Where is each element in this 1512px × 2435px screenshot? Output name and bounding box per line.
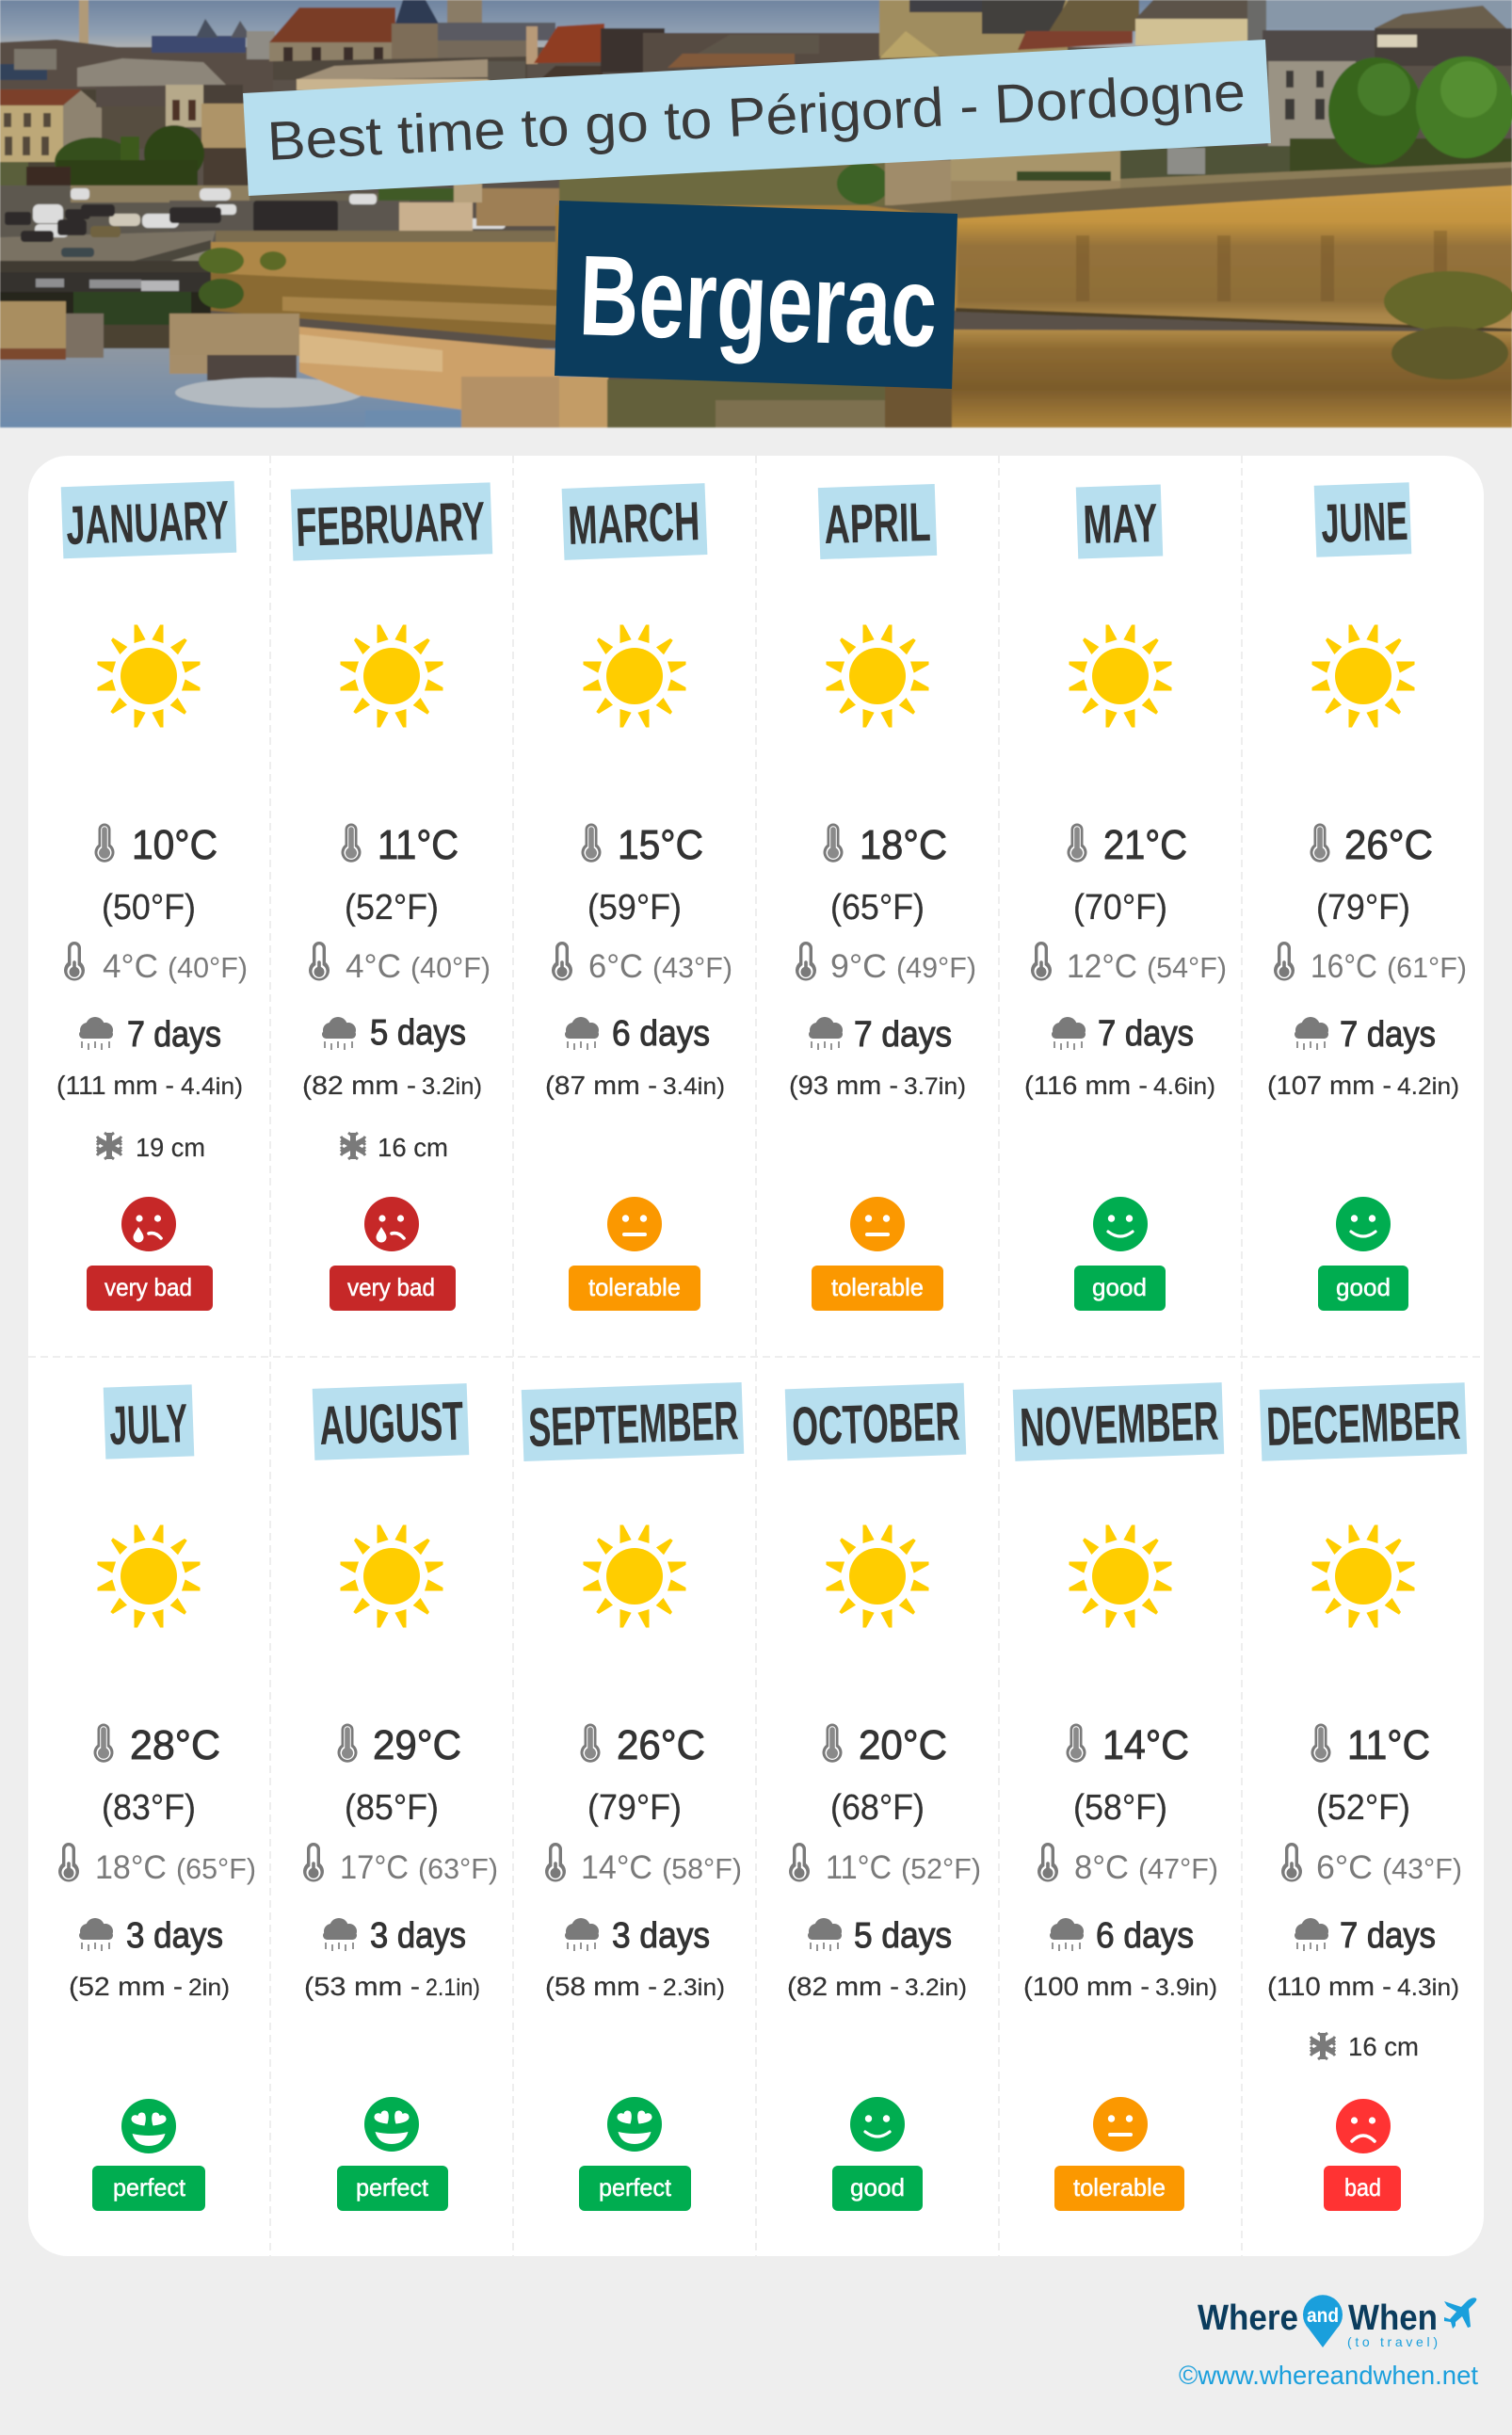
icon: sun — [341, 625, 442, 727]
logo: Where and When (to travel): (to travel) — [1347, 2334, 1438, 2349]
rainy days: 7 days — [1098, 1014, 1194, 1054]
snowfall: 19 cm — [136, 1133, 205, 1162]
low temperature: (65°F) — [176, 1852, 256, 1885]
precipitation — [545, 1071, 725, 1100]
low temperature: 14°C — [581, 1849, 652, 1886]
precipitation — [1267, 1071, 1459, 1100]
high temperature: 28°C — [130, 1722, 220, 1768]
rating face: tolerable — [850, 1197, 905, 1251]
month label: July — [104, 1384, 194, 1459]
panel: December — [1260, 1382, 1467, 2211]
rainy days: 3 days — [126, 1916, 223, 1956]
panel: June — [1267, 482, 1467, 1311]
high temperature: 26°C — [1344, 822, 1433, 868]
high temperature — [1066, 1722, 1189, 1768]
rating badge: perfect: perfect — [113, 2173, 186, 2201]
panel: January — [56, 481, 248, 1311]
low temperature: (40°F) — [410, 951, 491, 984]
low temperature — [1031, 942, 1227, 985]
rating badge: tolerable: tolerable — [1073, 2173, 1166, 2201]
rating face: perfect — [121, 2099, 176, 2153]
logo: Where and When (to travel): Where — [1198, 2298, 1298, 2338]
high temperature Fahrenheit: (58°F) — [1073, 1788, 1167, 1828]
month label: June: JUNE — [1320, 491, 1408, 555]
rainy days: 6 days — [1096, 1916, 1194, 1956]
month label: January — [61, 481, 236, 558]
snowfall — [97, 1133, 205, 1162]
precipitation — [69, 1972, 230, 2001]
panel: March — [545, 483, 732, 1311]
rainy days — [1052, 1014, 1194, 1054]
rating badge: very bad: very bad — [105, 1273, 192, 1301]
rating face: tolerable — [1093, 2097, 1148, 2152]
logo: Where and When (to travel): When — [1348, 2298, 1438, 2338]
rainy days: 7 days — [1340, 1015, 1436, 1055]
low temperature — [64, 942, 248, 985]
precipitation: 4.2in) — [1397, 1073, 1459, 1100]
month label: May — [1076, 485, 1163, 558]
rating badge: tolerable: tolerable — [588, 1273, 681, 1301]
high temperature Fahrenheit: (79°F) — [587, 1788, 682, 1828]
month label: September: SEPTEMBER — [527, 1390, 739, 1459]
icon: sun — [584, 1525, 685, 1627]
high temperature: 18°C — [860, 822, 947, 868]
panel: monthly climate card — [28, 456, 1484, 2256]
high temperature Fahrenheit: (65°F) — [830, 888, 925, 927]
high temperature Fahrenheit: (50°F) — [102, 888, 196, 927]
icon: sun — [827, 625, 928, 727]
rainy days: 7 days — [1340, 1916, 1436, 1956]
month label: August: AUGUST — [318, 1391, 464, 1457]
precipitation: (107 mm - — [1267, 1071, 1391, 1100]
low temperature: (43°F) — [1382, 1852, 1462, 1885]
rating badge: good: good — [1092, 1273, 1147, 1301]
precipitation: 4.3in) — [1397, 1975, 1459, 2001]
precipitation — [545, 1972, 725, 2001]
rainy days: 3 days — [370, 1916, 466, 1956]
month label: February — [291, 482, 492, 561]
low temperature — [796, 942, 976, 985]
rainy days — [565, 1014, 710, 1054]
rating face: tolerable — [607, 1197, 662, 1251]
precipitation — [1267, 1972, 1459, 2001]
low temperature — [303, 1843, 498, 1886]
rating badge: very bad — [87, 1266, 213, 1311]
rainy days — [1295, 1015, 1436, 1055]
high temperature — [337, 1722, 461, 1768]
rainy days — [809, 1015, 952, 1055]
precipitation: (116 mm - — [1024, 1071, 1148, 1100]
low temperature: 4°C — [103, 948, 158, 985]
high temperature Fahrenheit: (79°F) — [1316, 888, 1410, 927]
high temperature: 29°C — [373, 1722, 461, 1768]
precipitation — [304, 1972, 480, 2001]
low temperature: 6°C — [1316, 1849, 1373, 1886]
icon: sun — [1070, 625, 1171, 727]
month label: June — [1314, 482, 1411, 557]
rating face: bad — [1336, 2099, 1391, 2153]
rating face: very bad — [364, 1197, 419, 1251]
rating face: perfect — [364, 2097, 419, 2152]
low temperature: (40°F) — [168, 951, 248, 984]
precipitation: 2.1in) — [426, 1975, 480, 2001]
rainy days — [79, 1015, 221, 1055]
rainy days — [1050, 1916, 1194, 1956]
low temperature: (54°F) — [1147, 951, 1227, 984]
precipitation — [787, 1972, 967, 2001]
icon: sun — [341, 1525, 442, 1627]
rating badge: good — [1074, 1266, 1166, 1311]
rainy days — [565, 1916, 710, 1956]
month label: March: MARCH — [567, 491, 700, 556]
high temperature: 11°C — [1347, 1722, 1430, 1768]
high temperature — [582, 822, 703, 868]
rating face: good — [1336, 1197, 1391, 1251]
high temperature — [823, 1722, 947, 1768]
precipitation — [1024, 1071, 1215, 1100]
snowfall — [341, 1133, 448, 1162]
high temperature Fahrenheit: (83°F) — [102, 1788, 196, 1828]
title banner: Best time to go to Périgord - Dordogne — [265, 61, 1247, 172]
precipitation: (52 mm - — [69, 1972, 183, 2001]
icon: sun — [98, 1525, 200, 1627]
high temperature — [1311, 822, 1433, 868]
precipitation — [789, 1071, 966, 1100]
rainy days: 3 days — [612, 1916, 710, 1956]
month label: July: JULY — [108, 1393, 188, 1457]
low temperature: 6°C — [588, 948, 643, 985]
rating badge: perfect: perfect — [599, 2173, 672, 2201]
panel: May — [1024, 485, 1227, 1311]
precipitation: (110 mm - — [1267, 1972, 1391, 2001]
high temperature — [94, 822, 217, 868]
high temperature — [823, 822, 947, 868]
low temperature — [1281, 1843, 1462, 1886]
precipitation: (111 mm - — [56, 1071, 174, 1100]
rainy days: 5 days — [854, 1916, 952, 1956]
precipitation: 4.6in) — [1153, 1073, 1215, 1100]
icon: airplane — [1444, 2298, 1476, 2329]
high temperature Fahrenheit: (70°F) — [1073, 888, 1167, 927]
rating face: perfect — [607, 2097, 662, 2152]
low temperature: 8°C — [1074, 1849, 1129, 1886]
high temperature Fahrenheit: (85°F) — [345, 1788, 439, 1828]
precipitation: 3.2in) — [422, 1073, 482, 1100]
low temperature: (52°F) — [901, 1852, 981, 1885]
precipitation: (82 mm - — [787, 1972, 899, 2001]
low temperature: (49°F) — [896, 951, 976, 984]
month label: October: OCTOBER — [791, 1391, 960, 1458]
rating badge: tolerable — [569, 1266, 700, 1311]
high temperature: 11°C — [378, 822, 458, 868]
rainy days: 5 days — [370, 1013, 466, 1053]
precipitation: 2.3in) — [663, 1975, 725, 2001]
low temperature: 9°C — [830, 948, 887, 985]
low temperature: (58°F) — [662, 1852, 742, 1885]
low temperature: (47°F) — [1138, 1852, 1218, 1885]
rainy days — [323, 1916, 466, 1956]
icon: sun — [1312, 1525, 1414, 1627]
low temperature: (43°F) — [652, 951, 732, 984]
rating face: good — [850, 2097, 905, 2152]
high temperature — [580, 1722, 705, 1768]
high temperature Fahrenheit: (59°F) — [587, 888, 682, 927]
rainy days — [808, 1916, 952, 1956]
rating badge: bad: bad — [1344, 2173, 1381, 2201]
icon: sun — [584, 625, 685, 727]
month label: November — [1013, 1382, 1224, 1461]
rating badge: good — [1318, 1266, 1408, 1311]
snowfall — [1311, 2032, 1419, 2061]
rainy days — [322, 1013, 466, 1053]
rainy days — [1295, 1916, 1436, 1956]
low temperature: 12°C — [1067, 948, 1137, 985]
rating badge: very bad: very bad — [347, 1273, 435, 1301]
rating face: very bad — [121, 1197, 176, 1251]
title banner — [243, 40, 1271, 196]
city name box — [555, 201, 957, 389]
rating badge: tolerable — [1054, 2166, 1184, 2211]
low temperature: 17°C — [340, 1849, 409, 1886]
high temperature Fahrenheit: (68°F) — [830, 1788, 925, 1828]
low temperature — [1037, 1843, 1218, 1886]
panel: August — [303, 1383, 498, 2211]
logo: Where and When (to travel): and — [1307, 2305, 1339, 2327]
high temperature Fahrenheit: (52°F) — [345, 888, 439, 927]
rating badge: very bad — [330, 1266, 456, 1311]
panel: July — [58, 1384, 256, 2211]
rating badge: perfect — [579, 2166, 691, 2211]
month label: October — [785, 1383, 966, 1460]
high temperature — [1311, 1722, 1430, 1768]
high temperature Fahrenheit: (52°F) — [1316, 1788, 1410, 1828]
icon: sun — [1070, 1525, 1171, 1627]
low temperature — [58, 1843, 256, 1886]
icon: map pin — [1303, 2295, 1343, 2347]
low temperature — [545, 1843, 742, 1886]
snowfall: 16 cm — [378, 1133, 448, 1162]
rainy days — [79, 1916, 223, 1956]
month label: August — [313, 1383, 469, 1460]
rating badge: tolerable — [812, 1266, 943, 1311]
high temperature: 14°C — [1102, 1722, 1189, 1768]
hero photo: Bergerac riverside town and reflection — [0, 0, 1512, 427]
panel: November — [1013, 1382, 1224, 2211]
precipitation: (93 mm - — [789, 1071, 898, 1100]
low temperature: 16°C — [1311, 948, 1377, 985]
panel: February — [291, 482, 492, 1311]
high temperature: 20°C — [859, 1722, 947, 1768]
icon: sun — [98, 625, 200, 727]
icon: sun — [1312, 625, 1414, 727]
precipitation: (100 mm - — [1023, 1972, 1150, 2001]
precipitation — [1023, 1972, 1217, 2001]
snowfall: 16 cm — [1348, 2032, 1419, 2061]
low temperature: 4°C — [346, 948, 401, 985]
high temperature: 10°C — [132, 822, 217, 868]
precipitation: (87 mm - — [545, 1071, 657, 1100]
rainy days: 6 days — [612, 1014, 710, 1054]
website credit: ©www.whereandwhen.net — [1179, 2361, 1478, 2390]
low temperature — [552, 942, 732, 985]
icon: sun — [827, 1525, 928, 1627]
precipitation: 3.9in) — [1155, 1975, 1217, 2001]
rating badge: good: good — [850, 2173, 905, 2201]
low temperature — [789, 1843, 981, 1886]
low temperature: (61°F) — [1387, 951, 1467, 984]
rating badge: good — [832, 2166, 923, 2211]
rating badge: bad — [1324, 2166, 1401, 2211]
rating badge: tolerable: tolerable — [831, 1273, 924, 1301]
high temperature — [1068, 822, 1187, 868]
precipitation: 3.7in) — [904, 1073, 966, 1100]
rating badge: perfect: perfect — [356, 2173, 429, 2201]
month label: September — [522, 1382, 744, 1461]
rating face: good — [1093, 1197, 1148, 1251]
low temperature: (63°F) — [418, 1852, 498, 1885]
precipitation: (82 mm - — [302, 1071, 416, 1100]
precipitation: 3.2in) — [905, 1975, 967, 2001]
high temperature: 26°C — [617, 1722, 705, 1768]
panel: September — [522, 1382, 744, 2211]
city name box: Bergerac — [577, 231, 940, 371]
precipitation: 2in) — [188, 1975, 230, 2001]
panel: October — [785, 1383, 981, 2211]
rainy days: 7 days — [127, 1015, 221, 1055]
high temperature: 21°C — [1103, 822, 1187, 868]
month label: March — [562, 483, 707, 560]
panel: April — [789, 484, 976, 1311]
month label: April: APRIL — [824, 492, 931, 556]
month label: January: JANUARY — [65, 490, 230, 556]
logo: Where and When (to travel) — [1198, 2295, 1476, 2349]
precipitation: (53 mm - — [304, 1972, 420, 2001]
precipitation: (58 mm - — [545, 1972, 657, 2001]
month label: November: NOVEMBER — [1019, 1391, 1219, 1459]
high temperature: 15°C — [618, 822, 703, 868]
precipitation: 4.4in) — [181, 1073, 243, 1100]
precipitation — [56, 1071, 243, 1100]
low temperature: 11°C — [826, 1849, 892, 1886]
low temperature: 18°C — [95, 1849, 167, 1886]
month label: May: MAY — [1083, 492, 1158, 556]
low temperature — [1274, 942, 1467, 985]
precipitation — [302, 1071, 482, 1100]
low temperature — [309, 942, 491, 985]
rainy days: 7 days — [854, 1015, 952, 1055]
precipitation: 3.4in) — [663, 1073, 725, 1100]
rating badge: perfect — [337, 2166, 448, 2211]
rating badge: good: good — [1336, 1273, 1391, 1301]
rating badge: perfect — [92, 2166, 205, 2211]
month label: April — [818, 484, 937, 559]
month label: February: FEBRUARY — [295, 491, 486, 558]
high temperature — [341, 822, 458, 868]
